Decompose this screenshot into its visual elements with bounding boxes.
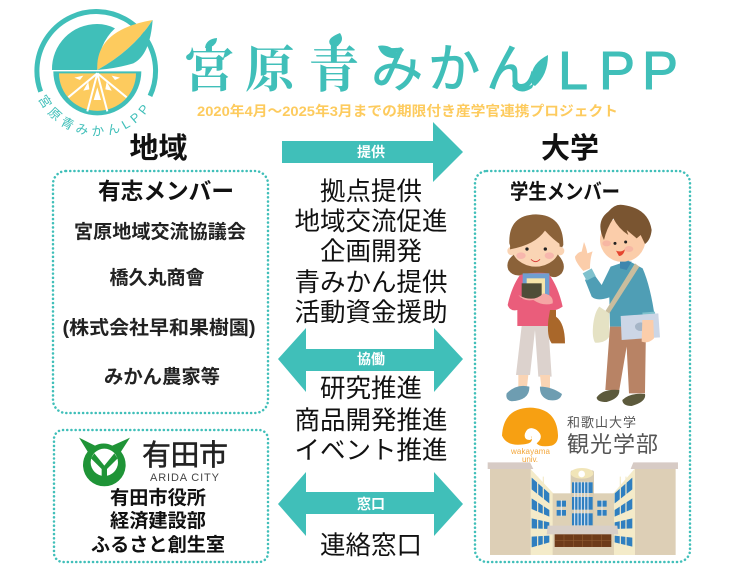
title: 宮原青みかんLPP	[184, 30, 678, 102]
text block: provided items: 青みかん提供	[294, 269, 448, 297]
text block: collaboration items: 研究推進	[320, 375, 422, 403]
logo: Miyahara Aomikan LPP emblem	[34, 9, 158, 136]
girl	[507, 214, 564, 277]
city name: 有田市: 有田市	[142, 439, 228, 472]
text block: collaboration items: イベント推進	[294, 437, 448, 465]
text block: provided items: 拠点提供	[320, 178, 422, 206]
text block: provided items	[294, 178, 448, 327]
panel: university	[475, 171, 690, 562]
logo text: univ.: univ.	[522, 455, 538, 464]
office: 有田市役所: 有田市役所	[110, 487, 206, 509]
text block: provided items: 活動資金援助	[294, 299, 448, 327]
subtitle: project period: 2020年4月～2025年3月までの期限付き産学官連携プロジェクト	[197, 103, 618, 119]
text block: collaboration items	[294, 375, 448, 465]
title: 宮原青みかんLPP: 宮原青	[184, 30, 359, 102]
panel heading: 有志メンバー: 有志メンバー	[98, 178, 234, 204]
arrow: 協働 (two-way)	[278, 328, 463, 392]
heading: 地域: 地域	[129, 132, 188, 165]
arrow label: 協働: 協働	[357, 351, 385, 367]
arrow: 窓口 (two-way)	[278, 472, 463, 536]
illustration: two students	[506, 205, 660, 406]
member: 橋久丸商會: 橋久丸商會	[110, 267, 204, 289]
text block: provided items: 企画開発	[320, 238, 422, 266]
arrow label: 提供: 提供	[357, 144, 385, 160]
boy	[600, 218, 645, 262]
panel heading: 学生メンバー: 学生メンバー	[510, 181, 620, 204]
icon: Arida City emblem	[79, 438, 130, 486]
logo: Miyahara Aomikan LPP emblem: 宮原青みかんLPP	[38, 94, 146, 136]
office: 経済建設部: 経済建設部	[110, 510, 206, 532]
text: 和歌山大学: 和歌山大学	[567, 415, 636, 430]
panel: volunteer members	[53, 171, 268, 413]
text block: contact: 連絡窓口	[320, 532, 422, 560]
logo text: wakayama: wakayama	[510, 447, 551, 456]
text block: collaboration items: 商品開発推進	[294, 407, 448, 435]
member: 株式会社早和果樹園: (株式会社早和果樹園)	[62, 317, 256, 339]
illustration: university building	[488, 462, 678, 555]
panel: Arida City	[54, 430, 268, 562]
heading: 大学: 大学	[541, 132, 599, 165]
title: 宮原青みかんLPP: みかん	[371, 41, 538, 99]
member: 宮原地域交流協議会: 宮原地域交流協議会	[74, 221, 246, 243]
arrow label: 窓口: 窓口	[357, 496, 385, 512]
logo: Wakayama University	[502, 408, 558, 464]
text block: provided items: 地域交流促進	[294, 208, 448, 236]
city name: ARIDA CITY: ARIDA CITY	[150, 472, 220, 484]
arrow: 提供 (rightward)	[282, 122, 463, 182]
member: みかん農家等: みかん農家等	[104, 366, 220, 388]
title: 宮原青みかんLPP: LPP	[558, 41, 678, 101]
text: 観光学部: 観光学部	[567, 432, 658, 457]
office: ふるさと創生室: ふるさと創生室	[91, 534, 225, 556]
